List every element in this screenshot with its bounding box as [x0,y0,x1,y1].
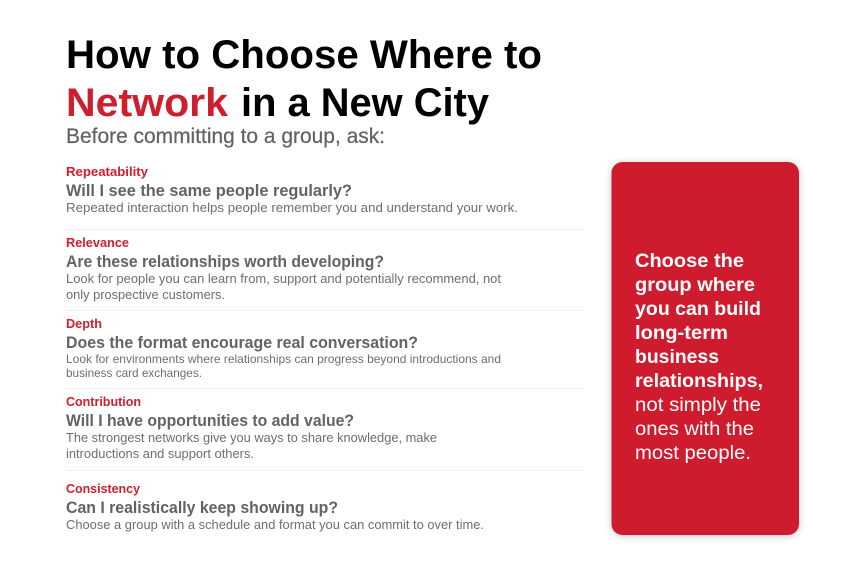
title: How to Choose Where to [66,33,542,77]
title [66,33,542,125]
question block: depth: Does the format encourage real conversation? [66,334,418,352]
subtitle: Before committing to a group, ask: [66,125,385,148]
question block: consistency: Can I realistically keep showing up? [66,499,338,517]
question block: consistency: Choose a group with a schedule and format you can commit to over time. [66,518,484,532]
callout text: long-term [635,322,728,344]
question block: depth: business card exchanges. [66,366,202,380]
question block: relevance: Are these relationships worth developing? [66,253,384,271]
question block: relevance: Look for people you can learn from, support and potentially recommend, not [66,272,502,286]
question block: contribution: The strongest networks give you ways to share knowledge, make [66,431,437,445]
callout text: Choose the [635,250,744,272]
question block: consistency: Consistency [66,481,141,496]
question block: contribution: Will I have opportunities to add value? [66,412,354,430]
title: Network [66,81,228,125]
question block: depth: Look for environments where relationships can progress beyond introductions and [66,352,501,366]
question block: repeatability: Repeated interaction helps people remember you and understand your work. [66,201,518,215]
question block: consistency [66,481,484,532]
callout text: most people. [635,442,751,464]
callout text: not simply the [635,394,761,416]
question block: repeatability: Repeatability [66,164,149,179]
question block: depth: Depth [66,316,102,331]
title: in a New City [241,81,489,125]
callout text: you can build [635,298,761,320]
callout text: group where [635,274,755,296]
callout text [635,250,763,464]
question block: contribution: Contribution [66,394,141,409]
question block: depth [66,316,501,380]
panel: takeaway callout [612,162,799,535]
callout text: relationships, [635,370,763,392]
question block: contribution: introductions and support others. [66,447,254,461]
question block: repeatability: Will I see the same people regularly? [66,182,352,200]
question block: relevance: Relevance [66,235,129,250]
question block: repeatability [66,164,518,215]
question block: contribution [66,394,437,461]
question block: relevance: only prospective customers. [66,288,225,302]
callout text: ones with the [635,418,754,440]
question block: relevance [66,235,502,302]
callout text: business [635,346,719,368]
